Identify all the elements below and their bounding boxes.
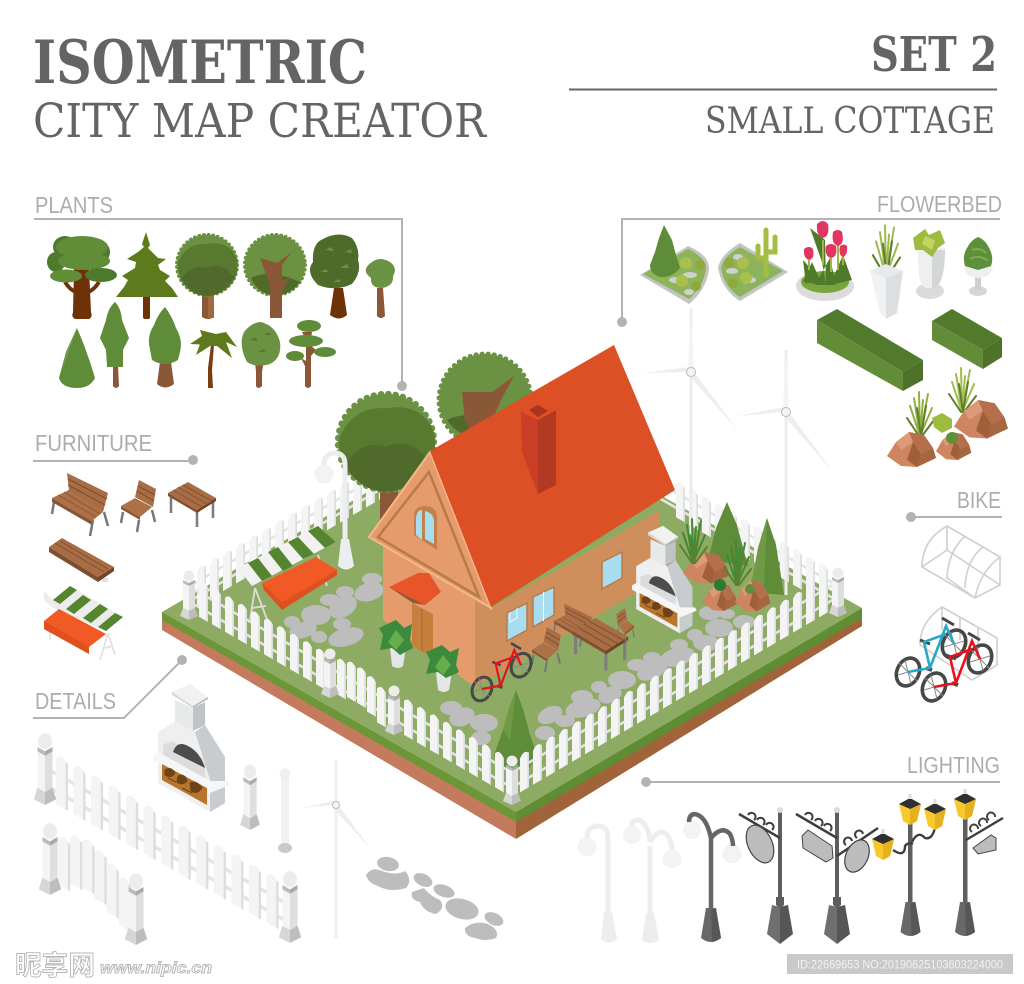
lantern lamp triple — [872, 794, 946, 936]
back right fence — [660, 470, 838, 611]
panel: details — [33, 655, 506, 945]
back tree with branches — [439, 354, 531, 446]
watermark: image id — [787, 954, 1013, 974]
front right fence — [503, 568, 847, 805]
red bicycle — [468, 643, 535, 704]
chimney — [521, 402, 556, 494]
wind turbine left — [643, 308, 738, 545]
swing — [238, 526, 337, 622]
panel: plants — [34, 192, 407, 391]
door awning — [389, 573, 441, 605]
door — [412, 603, 433, 658]
street lamp with sign — [739, 807, 793, 944]
tree: leafy small — [242, 322, 280, 388]
empty bike rack — [922, 526, 1000, 598]
large round tree — [338, 394, 435, 520]
tree: bonsai — [286, 320, 336, 388]
outdoor oven — [153, 684, 230, 812]
front pine — [494, 690, 537, 770]
leader line: lighting — [641, 777, 1000, 787]
leader line: details — [33, 655, 187, 718]
panel: lighting — [578, 752, 1003, 944]
garden swing — [44, 586, 123, 660]
wind turbine right — [738, 350, 833, 595]
tree: dark leafy — [310, 234, 359, 318]
watermark: site logo — [15, 944, 212, 983]
short arched gate fence — [39, 823, 147, 945]
square planter — [870, 225, 903, 319]
side window 1 — [507, 603, 527, 641]
hedge long — [817, 309, 923, 391]
gable inner outline — [378, 472, 479, 597]
cup planter — [964, 237, 993, 296]
label: lighting: LIGHTING — [907, 752, 1000, 778]
watermark brand: 昵享网 — [15, 944, 95, 983]
rock garden — [887, 368, 1008, 467]
tall vase — [913, 229, 945, 299]
table set — [532, 604, 634, 672]
parked bikes in rack — [892, 607, 997, 705]
bench with back — [52, 473, 108, 536]
lantern lamp with sign — [954, 789, 1003, 936]
flowerbed with pine — [640, 225, 709, 304]
flowerbed with cactus — [718, 230, 788, 301]
tree: open branches — [245, 235, 305, 318]
white lamp double — [623, 820, 682, 943]
leader line: plants — [34, 219, 407, 391]
front wall — [383, 545, 475, 687]
back left fence — [189, 456, 389, 611]
main scene: cottage plot — [162, 308, 862, 839]
watermark url: www.nipic.cn — [100, 960, 212, 977]
heading: isometric: ISOMETRIC — [33, 28, 367, 98]
side window 3 — [602, 552, 622, 589]
panel: furniture — [33, 430, 216, 660]
tulip planter — [796, 221, 854, 301]
side window 2 — [533, 587, 554, 627]
set number: SET 2 — [871, 27, 997, 83]
label: details: DETAILS — [35, 688, 116, 714]
cottage — [369, 345, 675, 687]
roof — [430, 345, 675, 607]
street lamp with two signs — [796, 807, 878, 944]
label: plants: PLANTS — [35, 192, 113, 218]
tree: cone cypress — [59, 328, 95, 388]
label: bike: BIKE — [957, 487, 1001, 513]
front left fence — [180, 568, 512, 800]
watermark: image id: ID:22669653 NO:20190625103603224000 — [797, 960, 1003, 972]
single fence post — [240, 765, 260, 830]
tree: small round — [366, 259, 395, 318]
potted plant one — [379, 620, 413, 668]
panel: flowerbed — [617, 191, 1008, 467]
potted plant two — [426, 645, 459, 692]
flat bench — [49, 538, 114, 582]
leader line: flowerbed — [617, 219, 1000, 327]
tree: egg shaped — [149, 307, 181, 388]
gable trim — [369, 452, 491, 608]
subheading: city map creator: CITY MAP CREATOR — [33, 94, 487, 149]
hedge short — [932, 309, 1002, 369]
chair — [121, 480, 156, 532]
tree: broad oak — [47, 236, 117, 319]
table — [168, 482, 216, 527]
tree: round canopy — [177, 235, 238, 319]
wind turbine — [301, 760, 370, 938]
stone path left — [285, 574, 385, 649]
tree: tall slender — [100, 302, 129, 388]
header rule — [569, 88, 997, 90]
title — [33, 28, 487, 149]
panel: bike — [892, 487, 1002, 705]
label: flowerbed: FLOWERBED — [877, 191, 1002, 217]
white lamp single — [578, 826, 617, 942]
white pole — [278, 768, 292, 853]
long fence — [34, 733, 301, 943]
stone path right — [441, 607, 754, 744]
leader line: bike — [906, 512, 1002, 522]
tree: palm — [190, 330, 237, 388]
leader line: furniture — [33, 455, 198, 465]
gray lamp double — [683, 814, 742, 942]
platform — [162, 410, 862, 839]
rock and conifer group — [680, 502, 784, 612]
set heading — [569, 27, 997, 142]
right wall — [475, 510, 660, 687]
tree: pine — [116, 232, 178, 319]
outdoor oven in yard — [632, 526, 697, 633]
label: furniture: FURNITURE — [35, 430, 152, 456]
gable window — [414, 506, 437, 550]
garden lamp — [314, 453, 354, 570]
stepping stones — [366, 855, 506, 940]
